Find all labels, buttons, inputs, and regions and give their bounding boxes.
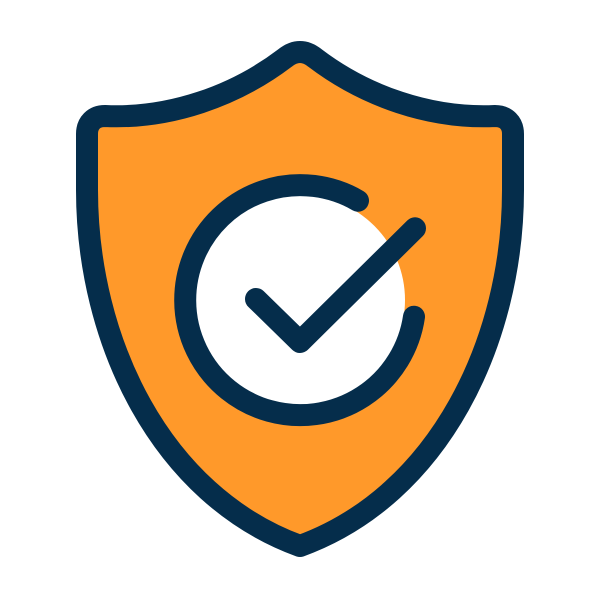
check mark [256, 228, 415, 342]
circular arc outline [185, 185, 414, 415]
white circle [195, 195, 405, 405]
shield body [87, 52, 513, 546]
